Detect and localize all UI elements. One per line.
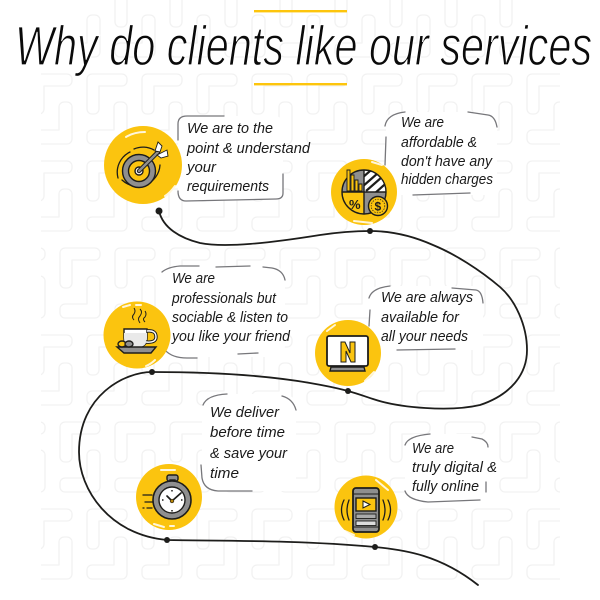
text block: We are xyxy=(172,270,215,287)
connector path xyxy=(79,211,527,585)
icon: smartphone with video xyxy=(334,476,398,538)
connector dot xyxy=(164,537,170,543)
text block: We are always xyxy=(381,289,473,306)
text block: & save your xyxy=(210,445,288,462)
connector dot xyxy=(156,208,162,214)
text block: We deliver xyxy=(210,404,280,421)
text block: sociable & listen to xyxy=(172,309,288,326)
text block: affordable & xyxy=(401,134,477,151)
text block: hidden charges xyxy=(401,171,493,188)
text block: We are xyxy=(401,114,444,131)
icon: television xyxy=(315,320,381,386)
text block: fully online xyxy=(412,478,479,495)
text block: professionals but xyxy=(171,290,277,307)
connector dot xyxy=(372,544,378,550)
text block: time xyxy=(210,465,239,482)
speech bubble xyxy=(405,434,488,502)
connector dot xyxy=(345,388,351,394)
text block: available for xyxy=(381,309,460,326)
icon: stopwatch xyxy=(136,464,202,530)
text block: don't have any xyxy=(401,153,493,170)
icon: pie chart with coin: % xyxy=(349,197,361,212)
speech bubble xyxy=(162,266,285,358)
panel: truly digital xyxy=(334,434,497,550)
text block: We are to the xyxy=(187,120,273,137)
icon: target with arrow xyxy=(104,126,182,204)
panel: professionals xyxy=(104,266,291,375)
panel: affordable xyxy=(331,112,497,234)
text block: point & understand xyxy=(186,140,311,157)
text block: you like your friend xyxy=(171,328,291,345)
text block: all your needs xyxy=(381,328,468,345)
text block xyxy=(210,404,288,482)
text block xyxy=(401,114,493,188)
connector dot xyxy=(367,228,373,234)
speech bubble xyxy=(178,116,283,201)
speech bubble xyxy=(369,286,483,350)
title accent bar bottom xyxy=(254,83,347,85)
text block xyxy=(381,289,473,345)
icon: coffee cup xyxy=(104,302,170,368)
text block: truly digital & xyxy=(412,459,497,476)
connector dot xyxy=(149,369,155,375)
text block xyxy=(412,440,497,495)
text block xyxy=(186,120,311,195)
panel: to the point xyxy=(104,116,311,214)
text block xyxy=(171,270,291,345)
text block: before time xyxy=(210,424,285,441)
speech bubble xyxy=(385,112,497,195)
text block: requirements xyxy=(187,178,269,195)
text block: We are xyxy=(412,440,454,457)
icon: pie chart with coin: $ xyxy=(374,200,382,214)
text block: your xyxy=(186,159,217,176)
title accent bar top xyxy=(254,10,347,12)
panel: always available xyxy=(315,286,483,394)
icon: pie chart with coin xyxy=(331,159,397,225)
panel: deliver before time xyxy=(136,394,296,543)
speech bubble xyxy=(201,394,296,491)
